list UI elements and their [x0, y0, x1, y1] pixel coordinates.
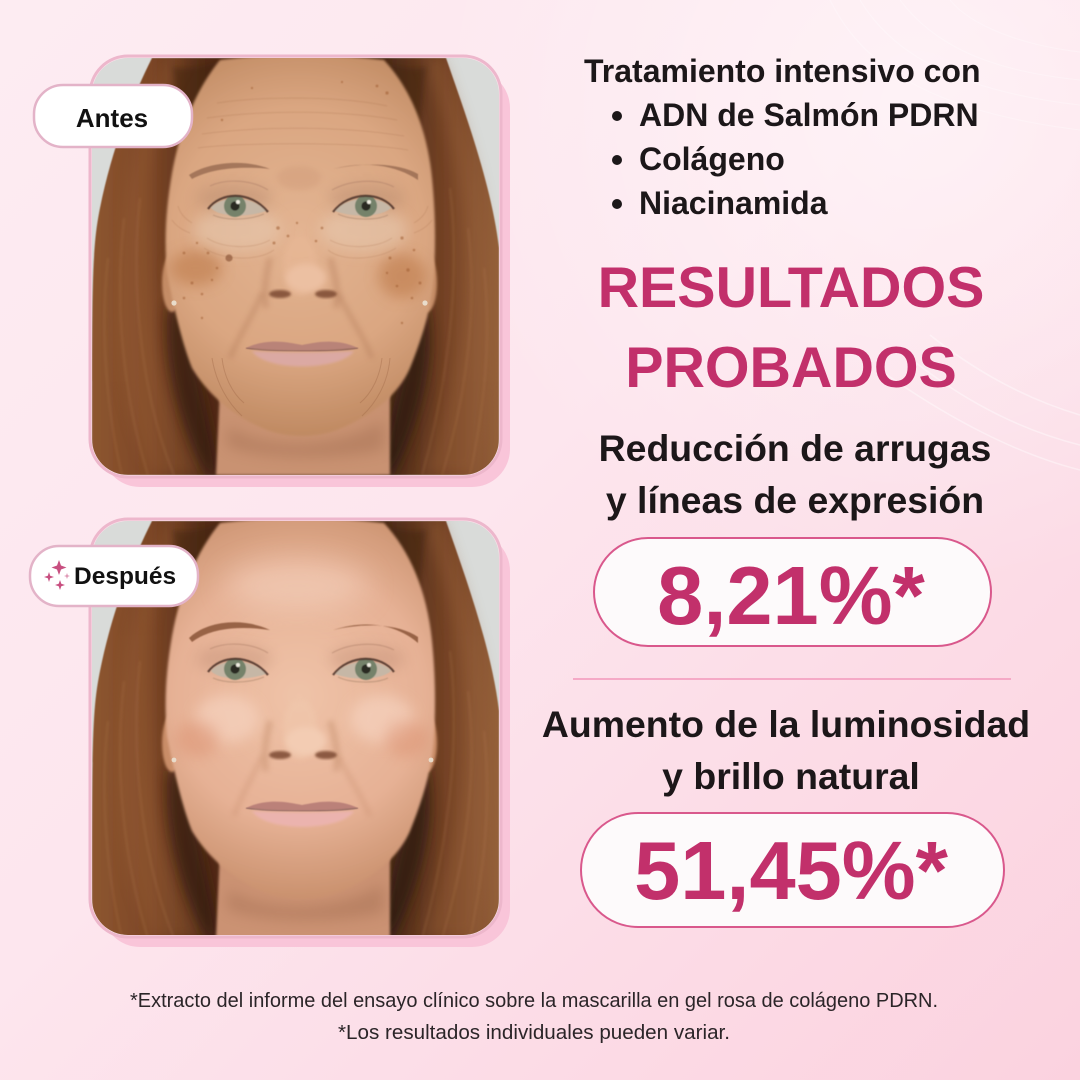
label: Después: Después	[74, 563, 176, 590]
stat pill: 51,45%: 51,45%*	[634, 824, 949, 917]
stat pill: 51,45%	[581, 813, 1004, 927]
label: Antes	[34, 85, 192, 147]
text: wrinkle reduction	[599, 427, 991, 521]
photo shadow card	[102, 70, 510, 487]
illustration: woman after treatment	[92, 516, 499, 938]
illustration: woman before treatment	[92, 53, 499, 475]
stat pill: 8,21%	[594, 538, 991, 646]
footnotes	[130, 990, 938, 1044]
photo shadow card	[102, 533, 510, 947]
ingredient list: ADN de Salmón PDRN	[639, 97, 979, 133]
text: luminosity increase: Aumento de la luminosidad	[542, 703, 1030, 745]
heading: resultados probados: PROBADOS	[625, 336, 957, 400]
stat pill: 8,21%: 8,21%*	[657, 549, 926, 642]
footnotes: *Los resultados individuales pueden variar.	[338, 1022, 730, 1044]
heading: treatment intro	[584, 53, 981, 221]
ingredient list: Colágeno	[639, 141, 785, 177]
text: wrinkle reduction: y líneas de expresión	[606, 479, 984, 521]
icon: sparkles	[44, 560, 70, 590]
panel: before photo	[90, 53, 510, 487]
text: wrinkle reduction: Reducción de arrugas	[599, 427, 991, 469]
heading: resultados probados	[598, 256, 984, 400]
photo frame	[90, 56, 501, 477]
photo frame	[90, 519, 501, 937]
text: luminosity increase: y brillo natural	[662, 755, 920, 797]
ingredient list	[612, 97, 979, 221]
ingredient list: Niacinamida	[639, 185, 828, 221]
label: Después	[30, 546, 198, 606]
text: luminosity increase	[542, 703, 1030, 797]
footnotes: *Extracto del informe del ensayo clínico sobre la mascarilla en gel rosa de colágeno PDRN.	[130, 990, 938, 1012]
heading: resultados probados: RESULTADOS	[598, 256, 984, 320]
heading: treatment intro: Tratamiento intensivo con	[584, 53, 981, 89]
panel: after photo	[90, 516, 510, 947]
label: Antes: Antes	[76, 103, 148, 133]
